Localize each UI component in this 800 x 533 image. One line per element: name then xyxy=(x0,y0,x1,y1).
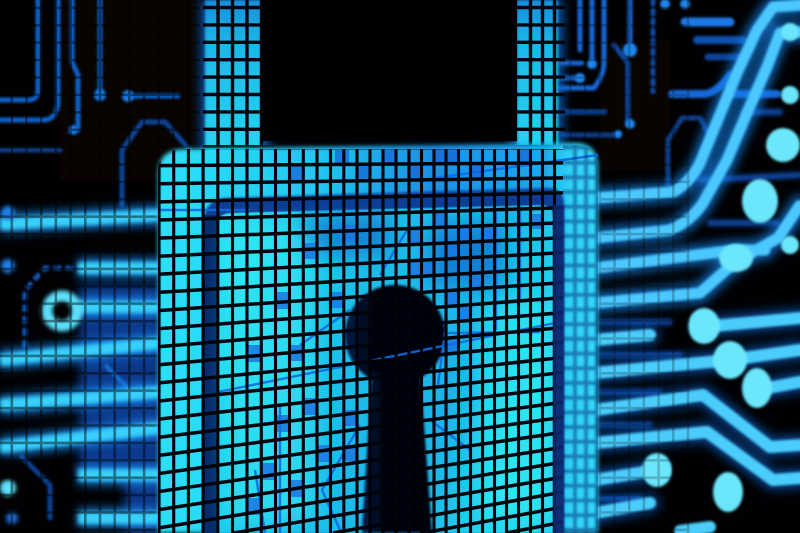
left nodes xyxy=(0,206,77,524)
blue cells on face xyxy=(247,213,542,515)
lighter patches on face xyxy=(225,225,550,523)
gap under the shackle xyxy=(262,0,517,141)
upper right beaded lines xyxy=(595,5,800,303)
circuit nodes: top left xyxy=(68,89,134,135)
body frame xyxy=(158,143,598,533)
circuit traces: top left xyxy=(0,0,190,205)
lower right lines xyxy=(595,318,800,531)
body grid, sharp part xyxy=(158,149,563,533)
faint mesh over right side xyxy=(560,0,690,533)
faint mesh over left side xyxy=(0,0,200,533)
shackle arms xyxy=(205,0,262,155)
thin circuit lines over face xyxy=(158,155,598,533)
right circuit traces xyxy=(595,5,800,531)
padlock body xyxy=(158,140,598,533)
keyhole xyxy=(345,285,445,533)
recess shadow xyxy=(204,188,564,533)
blurred right edge of recess xyxy=(553,205,564,533)
dim right traces xyxy=(600,112,800,498)
upper right glow xyxy=(595,5,800,303)
left glowing lines xyxy=(0,215,160,518)
right nodes xyxy=(642,23,800,512)
left dim traces and blocks xyxy=(20,268,160,533)
body grid, out-of-focus part xyxy=(563,145,598,533)
shackle of the padlock xyxy=(200,0,565,155)
blue cells in top of frame xyxy=(290,150,530,182)
lock face xyxy=(217,205,553,533)
shackle grid xyxy=(203,0,565,155)
circuit traces: top right xyxy=(560,0,777,185)
lower right glow xyxy=(595,318,800,513)
darker patches on face xyxy=(300,215,500,285)
circuit nodes: top right xyxy=(575,0,690,138)
shackle glow xyxy=(200,0,564,155)
